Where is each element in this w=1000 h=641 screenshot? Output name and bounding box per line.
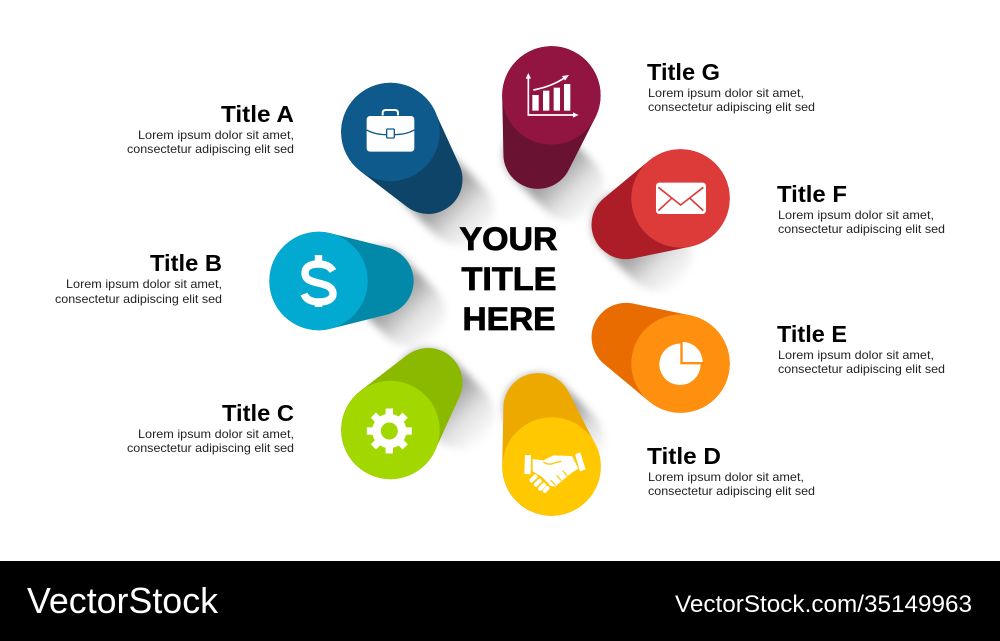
text block: Title F	[777, 181, 945, 236]
segment D: handshake cylinder	[482, 363, 610, 526]
segment A: briefcase cylinder	[321, 63, 488, 237]
icon: briefcase	[367, 110, 414, 152]
central title: YOUR	[460, 221, 558, 257]
text block: Title F: Lorem ipsum dolor sit amet,	[778, 208, 934, 222]
footer bar	[0, 561, 1000, 641]
face E	[631, 314, 730, 413]
cylinder drop shadows	[379, 154, 658, 440]
cylinder side E	[574, 278, 746, 429]
segment C: gear cylinder	[321, 325, 488, 499]
segment E: pie chart cylinder	[574, 278, 746, 429]
central title: HERE	[462, 301, 556, 337]
text block: Title G	[647, 59, 815, 114]
text block: Title C: Lorem ipsum dolor sit amet,	[138, 427, 294, 441]
footer image id: VectorStock.com/35149963	[675, 591, 972, 618]
icon: dollar sign	[304, 255, 333, 307]
cylinder side C	[321, 325, 488, 499]
text block: Title G: Lorem ipsum dolor sit amet,	[648, 86, 804, 100]
text block: Title C: consectetur adipiscing elit sed	[127, 441, 294, 455]
text block: Title E: consectetur adipiscing elit sed	[778, 362, 945, 376]
face G	[502, 46, 601, 145]
footer logo: VectorStock	[27, 580, 219, 621]
segment G: growth chart cylinder	[482, 36, 610, 199]
central title	[460, 221, 558, 337]
face C	[341, 381, 440, 479]
face F	[631, 149, 730, 248]
icon: pie chart	[659, 342, 703, 385]
icon: envelope	[656, 183, 706, 214]
text block: Title A: Title A	[221, 101, 294, 127]
cylinder side D	[482, 363, 610, 526]
text block: Title B: Lorem ipsum dolor sit amet,	[66, 277, 222, 291]
text block: Title E	[777, 321, 945, 376]
text block: Title D: Title D	[647, 443, 721, 469]
text block: Title E: Title E	[777, 321, 847, 347]
central title: TITLE	[462, 261, 556, 297]
text block: Title A: consectetur adipiscing elit sed	[127, 142, 294, 156]
text block: Title D: consectetur adipiscing elit sed	[648, 484, 815, 498]
text block: Title D: Lorem ipsum dolor sit amet,	[648, 470, 804, 484]
icon: growth chart	[526, 73, 579, 118]
text block: Title E: Lorem ipsum dolor sit amet,	[778, 348, 934, 362]
cylinder side A	[321, 63, 488, 237]
icon: handshake	[524, 452, 586, 494]
text block: Title G: Title G	[647, 59, 720, 85]
segment B: dollar cylinder	[269, 232, 414, 330]
text block: Title G: consectetur adipiscing elit sed	[648, 100, 815, 114]
text block: Title D	[647, 443, 815, 498]
text block: Title A: Lorem ipsum dolor sit amet,	[138, 128, 294, 142]
text block: Title B: Title B	[150, 250, 222, 276]
text block: Title B	[55, 250, 222, 306]
text block: Title F: consectetur adipiscing elit sed	[778, 222, 945, 236]
text block: Title C: Title C	[222, 400, 294, 426]
text block: Title A	[127, 101, 294, 156]
icon: gear	[367, 408, 412, 454]
cylinder side B	[269, 232, 414, 330]
text block: Title C	[127, 400, 294, 455]
text block: Title F: Title F	[777, 181, 847, 207]
face B	[269, 232, 368, 330]
face A	[341, 83, 440, 181]
face D	[502, 417, 601, 516]
segment F: envelope cylinder	[574, 133, 746, 284]
cylinder side F	[574, 133, 746, 284]
text block: Title B: consectetur adipiscing elit sed	[55, 292, 222, 306]
cylinder side G	[482, 36, 610, 199]
